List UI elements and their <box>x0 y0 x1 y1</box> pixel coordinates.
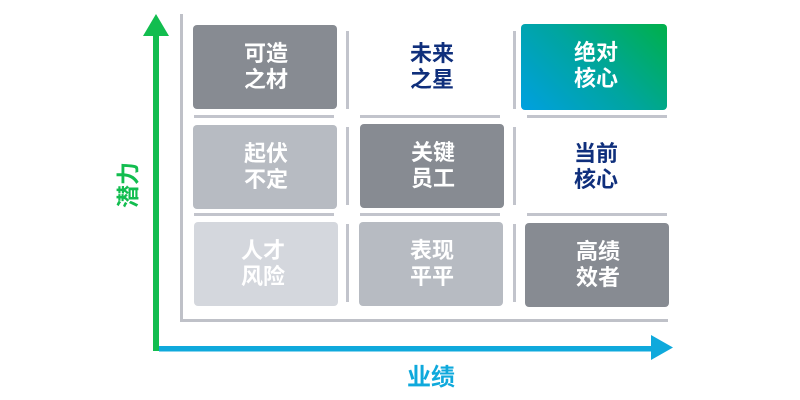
tile: 未来之星 <box>410 41 454 92</box>
tile: 高绩效者: 高绩 <box>576 239 620 264</box>
tile: 可造之材: 之材 <box>244 67 288 92</box>
tile: 可造之材: 可造 <box>244 41 288 66</box>
tile: 人才风险: 风险 <box>241 264 285 289</box>
tile: 当前核心: 当前 <box>574 141 618 166</box>
tile: 未来之星: 未来 <box>410 41 454 66</box>
tile: 人才风险 <box>194 222 338 306</box>
tile: 当前核心 <box>574 141 618 192</box>
tile: 人才风险: 人才 <box>241 238 285 263</box>
arrow: performance axis <box>159 335 673 360</box>
tile: 关键员工: 关键 <box>411 140 455 165</box>
tile: 未来之星: 之星 <box>410 67 454 92</box>
tile: 可造之材 <box>193 25 337 109</box>
tile: 起伏不定: 不定 <box>244 167 288 192</box>
tile: 表现平平: 表现 <box>410 238 454 263</box>
axis label: 业绩: 业绩 <box>407 364 455 391</box>
tile: 起伏不定: 起伏 <box>244 141 288 166</box>
axis label: 潜力: 潜力 <box>115 162 141 208</box>
tile: 关键员工: 员工 <box>411 166 455 191</box>
arrow: potential axis <box>143 14 169 351</box>
tile: 绝对核心 <box>521 24 667 110</box>
tile: 起伏不定 <box>193 125 337 209</box>
tile: 关键员工 <box>360 124 504 208</box>
tile: 高绩效者: 效者 <box>576 265 620 290</box>
tile: 绝对核心: 绝对 <box>574 40 618 65</box>
tile: 表现平平 <box>359 222 503 306</box>
tile: 当前核心: 核心 <box>574 167 618 192</box>
tile: 高绩效者 <box>525 223 669 307</box>
tile: 绝对核心: 核心 <box>574 66 618 91</box>
tile: 表现平平: 平平 <box>410 264 454 289</box>
